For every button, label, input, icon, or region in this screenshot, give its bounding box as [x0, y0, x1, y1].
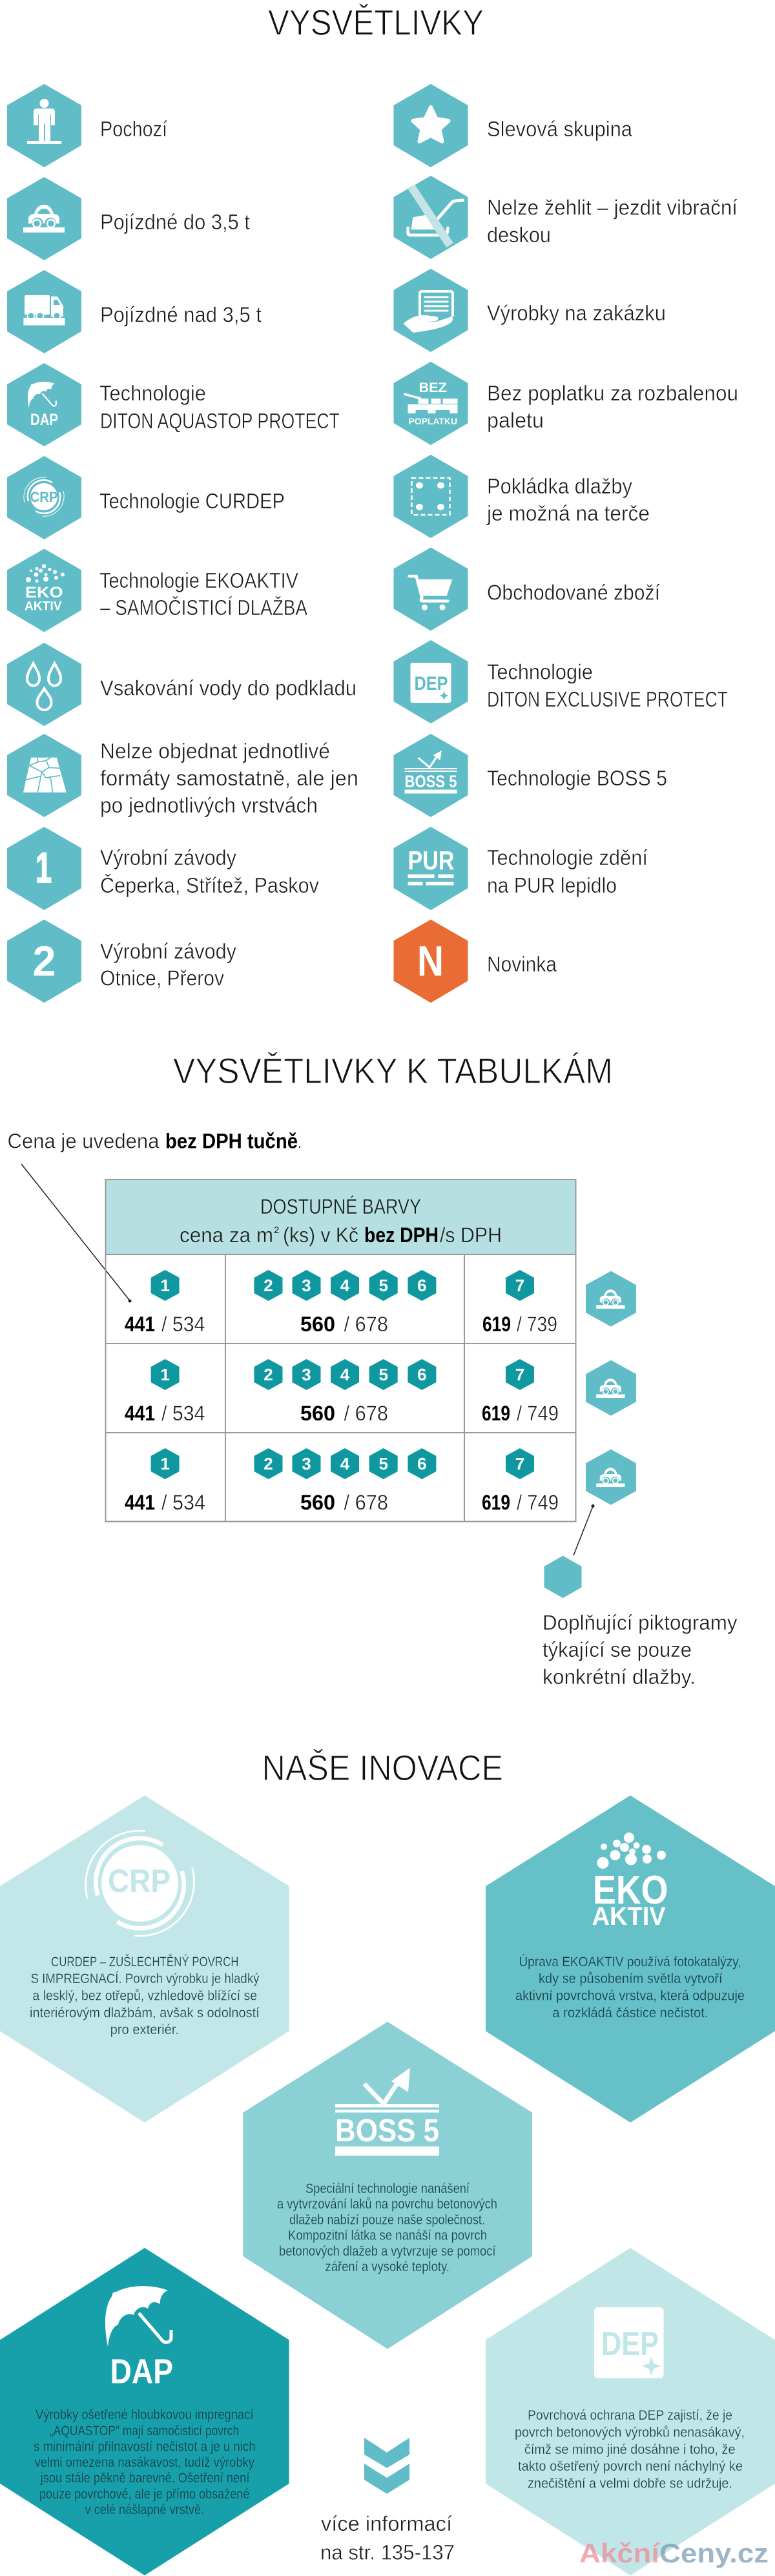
- panel: DEP: [486, 2248, 775, 2575]
- table header: /s DPH: [440, 1223, 502, 1247]
- prices row 2: 619: [482, 1402, 510, 1425]
- colour hexes row 1: [151, 1270, 534, 1301]
- prices row 2: [125, 1402, 559, 1425]
- table header: bez DPH: [364, 1223, 439, 1247]
- icon: CRP logo: [7, 456, 81, 539]
- label: formáty samostatně, ale jen: [100, 766, 358, 790]
- row 2: [125, 1359, 559, 1425]
- watermark: AkčníCeny.cz: Akční: [579, 2538, 660, 2568]
- description: znečištění a velmi dobře se udržuje.: [528, 2477, 732, 2491]
- label: Technologie: [99, 381, 206, 405]
- table header: cena za m: [180, 1223, 273, 1247]
- label: [487, 195, 738, 247]
- note: additional pictograms: [542, 1611, 738, 1688]
- description: v celé nášlapné vrstvě.: [85, 2502, 204, 2517]
- legend item: Novinka: [394, 920, 557, 1002]
- icon: BOSS 5: [394, 734, 468, 817]
- panel: CRP: [0, 1796, 289, 2123]
- prices row 1: / 534: [161, 1313, 205, 1336]
- description: S IMPREGNACÍ. Povrch výrobku je hladký: [31, 1971, 260, 1986]
- text: more information: více informací: [321, 2512, 452, 2535]
- table header: DOSTUPNÉ BARVY: [260, 1195, 421, 1218]
- colour hexes row 2: 7: [515, 1365, 524, 1384]
- colour hexes row 2: [151, 1359, 534, 1390]
- legend item: Pokládka dlažby na terče: [394, 455, 650, 538]
- prices row 3: 441: [125, 1491, 155, 1514]
- icon: EKO AKTIV logo: AKTIV: [25, 599, 62, 614]
- colour hexes row 1: 7: [515, 1276, 524, 1295]
- panel: BOSS 5: [243, 2022, 532, 2349]
- icon: car: [7, 177, 81, 260]
- prices row 1: / 739: [517, 1313, 557, 1336]
- label: po jednotlivých vrstvách: [100, 793, 318, 817]
- colour hexes row 2: 2: [264, 1365, 273, 1384]
- description: betonových dlažeb a vytvrzuje se pomocí: [279, 2244, 496, 2259]
- icon: side car hex row 1: [586, 1271, 636, 1327]
- prices row 2: / 749: [517, 1402, 559, 1425]
- label: je možná na terče: [486, 501, 650, 525]
- label: DITON AQUASTOP PROTECT: [100, 409, 340, 433]
- label: deskou: [487, 223, 551, 247]
- label: Technologie zdění: [487, 846, 648, 869]
- legend item: Výrobní závody 1: [7, 827, 319, 910]
- icon: number 1: 1: [36, 844, 52, 891]
- label: Nelze objednat jednotlivé: [100, 739, 330, 763]
- label: Vsakování vody do podkladu: [100, 676, 356, 700]
- icon: DEP: [394, 640, 468, 723]
- description: aktivní povrchová vrstva, která odpuzuje: [515, 1988, 745, 2003]
- title: Vysvětlivky: VYSVĚTLIVKY: [268, 2, 484, 43]
- icon: pedestals: [394, 455, 468, 538]
- description: Povrchová ochrana DEP zajistí, že je: [528, 2408, 732, 2423]
- colour hexes row 2: 4: [340, 1365, 350, 1384]
- colour hexes row 1: 1: [160, 1276, 170, 1295]
- icon: irregular paving: [7, 734, 81, 817]
- colour hexes row 3: 3: [302, 1454, 311, 1473]
- heading: Vysvětlivky k tabulkám: VYSVĚTLIVKY K TABULKÁM: [173, 1050, 613, 1091]
- description: dlažeb nabízí pouze naše společnost.: [289, 2213, 485, 2227]
- legend item: Nelze žehlit: [394, 176, 738, 259]
- table header: 2: [274, 1225, 279, 1236]
- legend item: Vsakování vody do podkladu: [7, 643, 356, 726]
- description: [277, 2181, 497, 2274]
- table grid: [106, 1254, 576, 1522]
- icon: PUR: [394, 827, 468, 910]
- prices row 3: [125, 1491, 559, 1514]
- description: [30, 1955, 260, 2037]
- description: velmi omezena nasákavost, tudíž výrobky: [35, 2455, 254, 2470]
- note: price without VAT bold: Cena je uvedena: [8, 1129, 160, 1152]
- icon: number 2: 2: [32, 937, 56, 984]
- legend item: Pojízdné nad 3,5 t: [7, 270, 262, 353]
- icon: N orange: [394, 920, 468, 1002]
- legend item: Technologie DEP: [394, 640, 728, 723]
- text: more information: [320, 2512, 455, 2564]
- note: price without VAT bold: bez DPH tučně: [165, 1129, 298, 1152]
- icon: DAP umbrella: DAP: [30, 411, 58, 429]
- label: Pokládka dlažby: [487, 474, 632, 498]
- label: paletu: [487, 408, 544, 432]
- label: Výrobky na zakázku: [487, 301, 666, 325]
- description: Kompozitní látka se nanáší na povrch: [288, 2228, 487, 2243]
- colour hexes row 1: 4: [340, 1276, 350, 1295]
- label: – SAMOČISTICÍ DLAŽBA: [100, 596, 307, 619]
- text: more information: na str. 135-137: [320, 2541, 455, 2564]
- label: na PUR lepidlo: [487, 873, 617, 897]
- prices row 1: 619: [482, 1313, 511, 1336]
- note: additional pictograms: Doplňující piktogramy: [542, 1611, 738, 1634]
- colour hexes row 3: 2: [264, 1454, 273, 1473]
- icon: hand holding document: [394, 269, 468, 352]
- label: [99, 568, 307, 619]
- prices row 3: 560: [300, 1491, 335, 1514]
- label: Čeperka, Střítež, Paskov: [100, 873, 319, 897]
- label: [100, 939, 236, 990]
- price table: [106, 1179, 576, 1522]
- row 1: [125, 1270, 557, 1336]
- icon: BOSS 5: BOSS 5: [404, 771, 457, 791]
- icon: pallet: POPLATKU: [408, 417, 457, 426]
- description: Výrobky ošetřené hloubkovou impregnací: [36, 2407, 254, 2422]
- legend item: Výrobní závody 2: [7, 920, 236, 1002]
- description: Speciální technologie nanášení: [305, 2181, 470, 2196]
- arrow: price pointer: [21, 1164, 132, 1302]
- prices row 2: / 534: [161, 1402, 205, 1425]
- icon: DAP umbrella: [7, 363, 81, 446]
- description: s minimální přilnavostí nečistot a je u nich: [34, 2439, 256, 2455]
- description: takto ošetřený povrch není náchylný ke: [518, 2459, 743, 2474]
- colour hexes row 2: 3: [302, 1365, 311, 1384]
- row 3: [125, 1448, 559, 1514]
- label: Technologie EKOAKTIV: [99, 568, 298, 592]
- prices row 2: 441: [125, 1402, 155, 1425]
- description: [515, 2408, 745, 2491]
- colour hexes row 3: 6: [417, 1454, 427, 1473]
- label: Slevová skupina: [487, 117, 633, 141]
- arrow: pictogram pointer: [574, 1504, 594, 1555]
- colour hexes row 1: 3: [302, 1276, 311, 1295]
- label: Výrobní závody: [100, 939, 236, 963]
- description: čímž se mimo jiné dosáhne i toho, že: [524, 2442, 735, 2457]
- legend item: Technologie CURDEP: [7, 456, 285, 539]
- logo text DAP: DAP: [110, 2353, 173, 2391]
- label: Výrobní závody: [100, 846, 236, 869]
- logo: EKO AKTIV: [592, 1833, 668, 1931]
- icon: side car hex row 2: [586, 1360, 636, 1416]
- label: Pochozí: [100, 117, 167, 141]
- icon: crossed-out plate compactor: [394, 176, 468, 259]
- prices row 2: / 678: [344, 1402, 388, 1425]
- label: [487, 660, 728, 711]
- legend item: Výrobky na zakázku: [394, 269, 666, 352]
- legend item: Technologie DAP: [7, 363, 340, 446]
- description: povrch betonových výrobků nenasákavý,: [515, 2425, 745, 2440]
- label: Bez poplatku za rozbalenou: [487, 381, 738, 405]
- icon: plain hexagon: [544, 1555, 581, 1598]
- logo: DEP: [594, 2307, 664, 2378]
- prices row 3: 619: [482, 1491, 510, 1514]
- watermark: AkčníCeny.cz: Ceny.cz: [659, 2538, 769, 2568]
- icon: DEP: DEP: [415, 673, 448, 694]
- prices row 1: 560: [300, 1313, 335, 1336]
- icon: EKO AKTIV logo: EKO: [25, 584, 63, 601]
- label: [487, 381, 738, 432]
- colour hexes row 3: 1: [160, 1454, 170, 1473]
- prices row 1: [125, 1313, 557, 1336]
- logo: CRP: [86, 1831, 194, 1936]
- label: Pojízdné nad 3,5 t: [100, 302, 262, 327]
- legend item: Slevová skupina: [394, 84, 633, 167]
- prices row 3: / 534: [161, 1491, 205, 1514]
- legend item: Technologie BOSS 5: [394, 734, 667, 817]
- arrow: double chevron down: [364, 2438, 409, 2494]
- label: [100, 739, 358, 817]
- icon: pallet: [394, 362, 468, 445]
- legend item: Pojízdné do 3,5 t: [7, 177, 250, 260]
- icon: truck: [7, 270, 81, 353]
- description: a lesklý, bez otřepů, vzhledově blížící se: [32, 1988, 257, 2003]
- icon: CRP logo: CRP: [30, 489, 58, 505]
- label: Technologie CURDEP: [99, 489, 285, 513]
- logo: DAP umbrella: [105, 2286, 171, 2347]
- prices row 3: / 749: [517, 1491, 559, 1514]
- colour hexes row 1: 5: [378, 1276, 388, 1295]
- icon: walking person: [7, 84, 81, 167]
- heading: Naše inovace: NAŠE INOVACE: [262, 1747, 503, 1788]
- colour hexes row 1: 2: [264, 1276, 273, 1295]
- watermark: AkčníCeny.cz: [579, 2538, 769, 2568]
- note: additional pictograms: týkající se pouze: [542, 1638, 692, 1661]
- note: additional pictograms: konkrétní dlažby.: [542, 1665, 696, 1688]
- label: Otnice, Přerov: [100, 966, 224, 990]
- table header: (ks) v Kč: [283, 1223, 358, 1247]
- description: interiérovým dlažbám, avšak s odolností: [30, 2006, 260, 2020]
- icon: shopping cart: [394, 548, 468, 630]
- description: kdy se působením světla vytvoří: [539, 1971, 723, 1986]
- label: [100, 846, 319, 897]
- label: Pojízdné do 3,5 t: [100, 210, 250, 234]
- logo text CRP: CRP: [108, 1863, 170, 1899]
- legend item: Technologie zdění PUR: [394, 827, 648, 910]
- logo: DEP: DEP: [601, 2325, 659, 2363]
- prices row 3: / 678: [344, 1491, 388, 1514]
- prices row 1: 441: [125, 1313, 155, 1336]
- label: [487, 846, 648, 897]
- description: Úprava EKOAKTIV používá fotokatalýzy,: [519, 1955, 741, 1969]
- icon: PUR: PUR: [408, 846, 455, 875]
- icon: side car hex row 3: [586, 1449, 636, 1505]
- colour hexes row 3: 5: [378, 1454, 388, 1473]
- label: Obchodované zboží: [487, 580, 660, 605]
- legend item: Nelze objednat jednotlivé formáty: [7, 734, 358, 817]
- icon: EKO AKTIV logo: [7, 549, 81, 632]
- note: price without VAT bold: .: [298, 1129, 302, 1152]
- label: Novinka: [487, 952, 557, 976]
- prices row 1: / 678: [344, 1313, 388, 1336]
- note: price without VAT bold: [8, 1129, 302, 1152]
- icon: star: [394, 84, 468, 167]
- legend item: Bez poplatku: [394, 362, 738, 445]
- icon: number 2: [7, 920, 81, 1002]
- label: Nelze žehlit – jezdit vibrační: [487, 195, 738, 220]
- label: Technologie: [487, 660, 593, 683]
- label: Technologie BOSS 5: [487, 766, 667, 790]
- panel: EKO AKTIV: [486, 1796, 775, 2123]
- description: „AQUASTOP" mají samočisticí povrch: [50, 2424, 239, 2438]
- description: pouze povrchové, ale je přímo obsažené: [39, 2487, 249, 2502]
- colour hexes row 2: 1: [160, 1365, 170, 1384]
- colour hexes row 3: 7: [515, 1454, 524, 1473]
- logo: EKO AKTIV: EKO: [593, 1868, 668, 1913]
- colour hexes row 2: 5: [378, 1365, 388, 1384]
- description: pro exteriér.: [110, 2022, 179, 2037]
- icon: pallet: BEZ: [418, 380, 447, 395]
- description: a vytvrzování laků na povrchu betonových: [277, 2197, 497, 2212]
- panel: DAP: [0, 2248, 289, 2575]
- legend item: Technologie EKOAKTIV: [7, 549, 307, 632]
- label: [99, 381, 340, 433]
- prices row 2: 560: [300, 1402, 335, 1425]
- table header: [106, 1179, 576, 1254]
- description: CURDEP – ZUŠLECHTĚNÝ POVRCH: [51, 1955, 239, 1969]
- colour hexes row 3: 4: [340, 1454, 350, 1473]
- colour hexes row 2: 6: [417, 1365, 427, 1384]
- colour hexes row 1: 6: [417, 1276, 427, 1295]
- description: a rozkládá částice nečistot.: [552, 2006, 708, 2020]
- logo: EKO AKTIV: AKTIV: [592, 1902, 666, 1931]
- logo: BOSS 5: [335, 2068, 439, 2156]
- colour hexes row 3: [151, 1448, 534, 1479]
- icon: number 1: [7, 827, 81, 910]
- logo: BOSS 5: BOSS 5: [335, 2114, 439, 2148]
- label: [486, 474, 650, 525]
- icon: N orange: N: [417, 937, 444, 984]
- legend item: Obchodované zboží: [394, 548, 660, 630]
- description: [515, 1955, 745, 2020]
- icon: water drops: [7, 643, 81, 726]
- description: [34, 2407, 256, 2517]
- legend item: Pochozí: [7, 84, 167, 167]
- description: jsou stále pěkně barevné. Ošetření není: [40, 2471, 250, 2486]
- description: záření a vysoké teploty.: [326, 2259, 450, 2274]
